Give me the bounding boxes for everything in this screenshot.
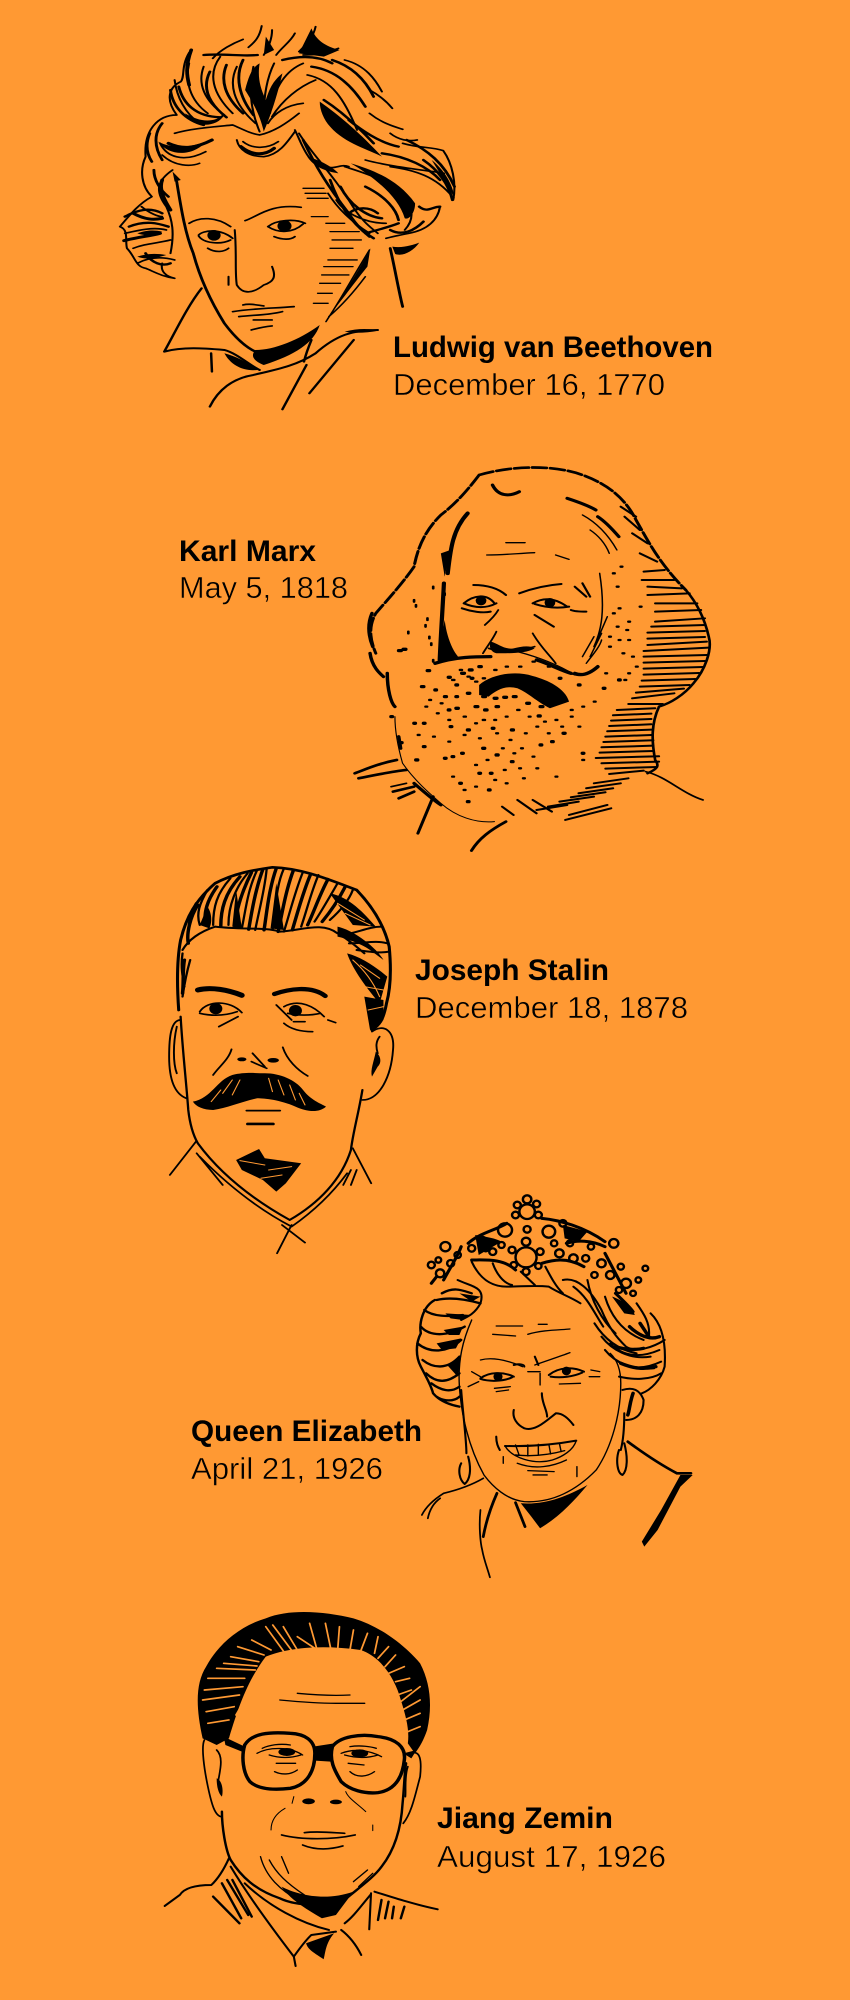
dark hair masses bbox=[137, 28, 455, 258]
right side hatching bbox=[502, 507, 709, 820]
additional hair strands bbox=[125, 55, 454, 265]
lip marks bbox=[246, 1108, 280, 1113]
eyes, brows, nose bbox=[462, 583, 590, 627]
nose bbox=[213, 1047, 308, 1076]
cheek hatching bbox=[303, 188, 369, 322]
face and collar bbox=[181, 1017, 362, 1220]
eyes, brows, nose, mouth bbox=[189, 207, 305, 330]
name: Jiang Zemin bbox=[437, 1802, 613, 1835]
portrait: Joseph Stalin bbox=[169, 867, 393, 1253]
collar and shoulders bbox=[165, 1858, 438, 1966]
name: Ludwig van Beethoven bbox=[393, 331, 713, 364]
glasses bbox=[243, 1733, 405, 1793]
moustache bbox=[479, 673, 569, 708]
nose and smile bbox=[496, 1393, 576, 1450]
jaw shading bbox=[282, 1887, 353, 1918]
portrait: Karl Marx bbox=[355, 467, 710, 851]
mouth bbox=[282, 1832, 355, 1849]
moustache bbox=[193, 1073, 326, 1111]
hair bbox=[177, 867, 390, 1030]
name: Karl Marx bbox=[179, 535, 316, 568]
earrings bbox=[459, 1390, 627, 1484]
face contour bbox=[440, 513, 468, 660]
hair outline bbox=[371, 467, 686, 653]
birth date: December 18, 1878 bbox=[415, 990, 688, 1025]
label: Joseph Stalin bbox=[415, 954, 688, 1025]
label: Ludwig van Beethoven bbox=[393, 331, 713, 402]
name: Joseph Stalin bbox=[415, 954, 609, 987]
chin beard bbox=[236, 1149, 301, 1192]
hair right bbox=[458, 1262, 665, 1420]
birth date: April 21, 1926 bbox=[191, 1451, 383, 1486]
label: Jiang Zemin bbox=[437, 1802, 666, 1874]
beard dots bbox=[391, 649, 620, 802]
face bbox=[459, 1320, 621, 1502]
hair mass bbox=[198, 1612, 430, 1753]
nose bbox=[302, 1798, 315, 1804]
birth date: August 17, 1926 bbox=[437, 1839, 666, 1874]
tiara bbox=[428, 1195, 648, 1296]
portrait: Jiang Zemin bbox=[165, 1612, 438, 1966]
birth date: December 16, 1770 bbox=[393, 367, 665, 402]
ears and face bbox=[203, 1740, 421, 1823]
birth date: May 5, 1818 bbox=[179, 570, 348, 605]
forehead lines bbox=[280, 1693, 365, 1703]
shoulders and collar bbox=[355, 760, 506, 851]
portrait: Ludwig van Beethoven bbox=[120, 26, 455, 409]
ears bbox=[169, 1020, 393, 1100]
hair outline and locks bbox=[120, 26, 454, 278]
name: Queen Elizabeth bbox=[191, 1415, 422, 1448]
brows and eyes bbox=[198, 989, 242, 995]
neck and shoulders bbox=[422, 1478, 490, 1577]
eyes bbox=[257, 1744, 382, 1776]
label: Queen Elizabeth bbox=[191, 1415, 422, 1486]
label: Karl Marx bbox=[179, 535, 348, 605]
hair hatching bbox=[203, 1623, 420, 1732]
hair dark streaks bbox=[183, 868, 345, 993]
face contour and collar bbox=[177, 182, 403, 353]
portrait: Queen Elizabeth bbox=[417, 1195, 693, 1577]
hair left roll bbox=[417, 1289, 480, 1407]
